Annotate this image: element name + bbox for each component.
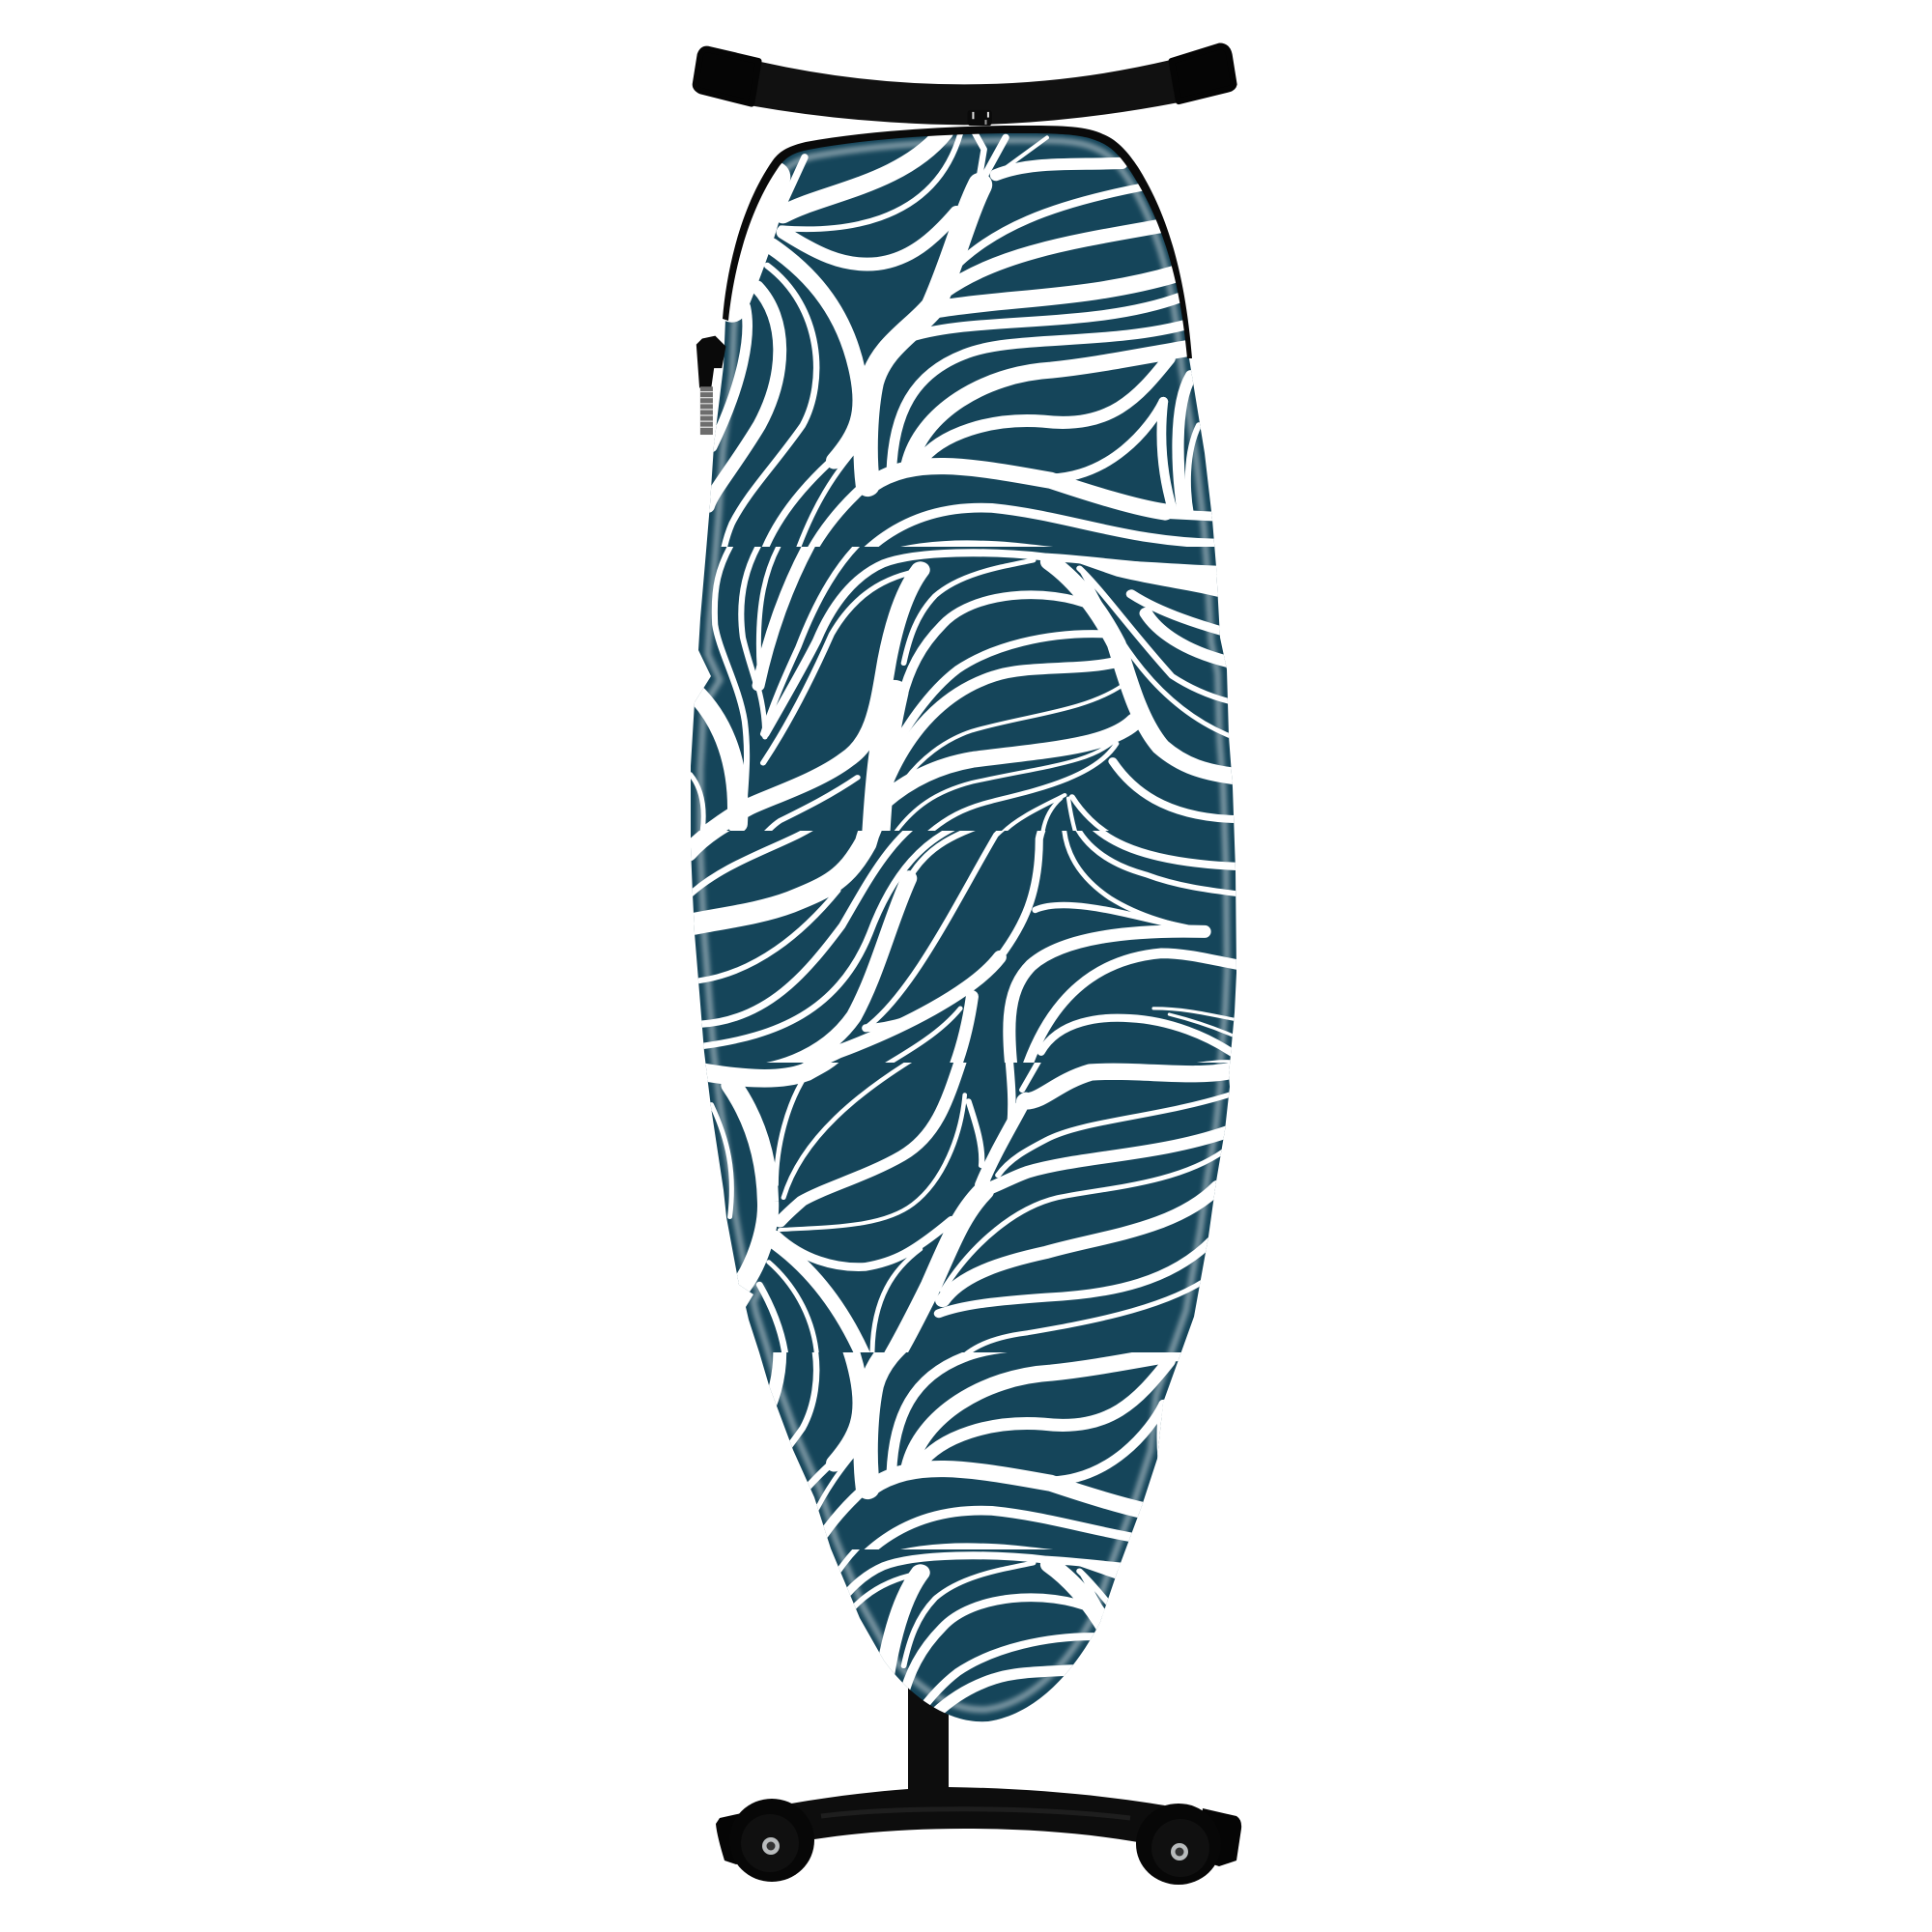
valve connector on left edge	[696, 336, 725, 435]
hinge bracket under handle	[968, 110, 992, 126]
black binding along board top edge	[723, 126, 1192, 358]
wave pattern in white	[689, 131, 1240, 1836]
wheel: left	[729, 1799, 814, 1882]
leg: vertical post and curved base bar	[791, 1686, 1165, 1842]
top handle bar with grip caps	[696, 46, 1234, 125]
board cover: teal patterned surface	[689, 128, 1240, 1836]
foot: right end cap	[1198, 1808, 1241, 1866]
ironing board illustration	[691, 43, 1242, 1885]
foot: left end cap	[716, 1808, 763, 1864]
wheel: right	[1136, 1804, 1221, 1885]
glossy rim highlight	[700, 140, 1227, 1710]
